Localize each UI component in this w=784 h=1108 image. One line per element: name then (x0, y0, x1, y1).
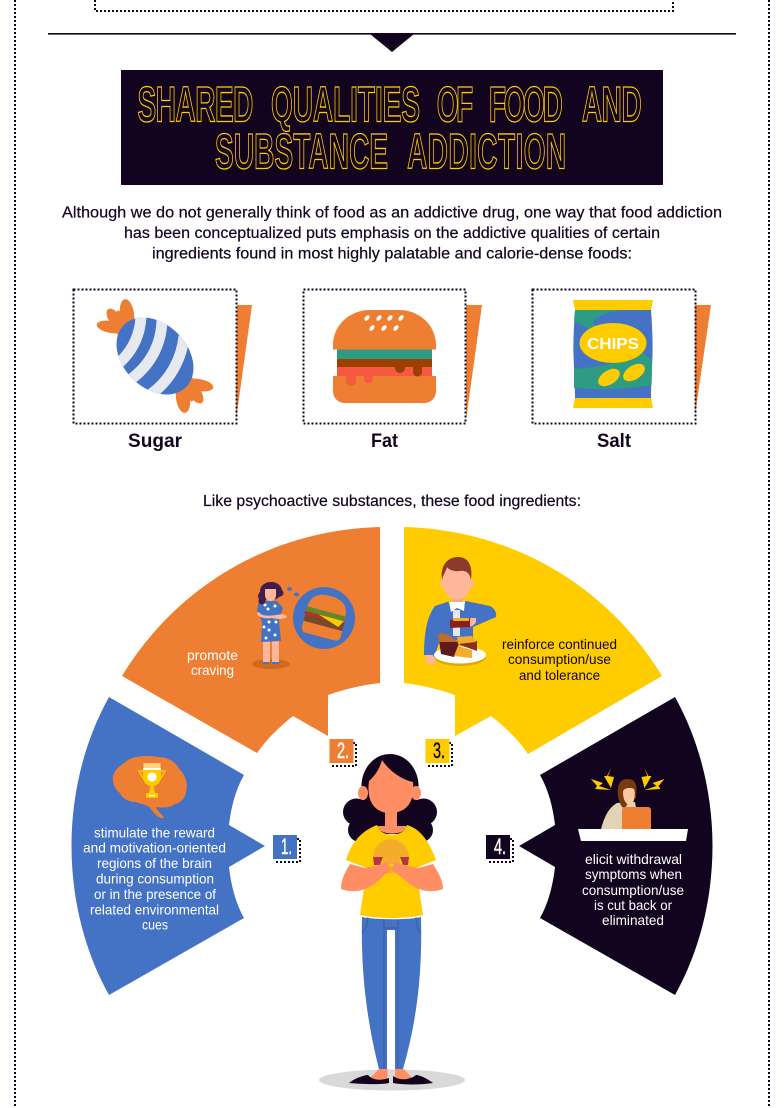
jeans stitching (362, 917, 421, 1068)
text: reinforce: consumption/use (508, 651, 611, 667)
text: stimulate: stimulate the reward (94, 824, 215, 840)
badge 1 (273, 834, 300, 862)
feet and shoes (364, 1069, 418, 1084)
face and neck (358, 760, 421, 834)
text: promote craving (187, 647, 238, 678)
panel: 2 promote craving (122, 527, 380, 753)
title banner: AND (582, 76, 642, 133)
text: promote craving: promote (187, 647, 238, 663)
title banner: QUALITIES (271, 76, 420, 133)
burger held (373, 839, 409, 873)
label: fat: Fat (371, 431, 399, 452)
text: stimulate: regions of the brain (97, 855, 212, 871)
text: reinforce: reinforce continued (502, 636, 617, 652)
jeans (362, 917, 421, 1069)
text: elicit: symptoms when (585, 866, 682, 882)
text: stimulate: related environmental (90, 902, 219, 918)
badge 4: 4. (494, 834, 506, 859)
text: reinforce (502, 636, 617, 683)
icon: chips bag (573, 300, 653, 408)
panel: fat (304, 290, 482, 452)
text: promote craving: craving (191, 662, 234, 678)
label: sugar: Sugar (128, 431, 183, 452)
title banner: SHARED (137, 76, 253, 133)
text: stimulate: cues (142, 916, 168, 932)
title banner: OF (437, 76, 473, 133)
badge 3: 3. (433, 738, 445, 763)
badge 2: 2. (337, 738, 349, 763)
badge 3 (426, 738, 452, 766)
illustration: man eating cake (424, 557, 496, 666)
text: elicit (582, 851, 684, 928)
icon: chips bag: CHIPS (587, 336, 639, 353)
title banner: SUBSTANCE (215, 123, 388, 180)
shirt (346, 825, 436, 918)
text: stimulate: and motivation-oriented (83, 840, 226, 856)
text: elicit: is cut back or (594, 897, 672, 913)
icon: candy (96, 298, 214, 414)
section divider with arrow (48, 33, 736, 52)
icon: burger (333, 310, 436, 403)
panel: 3 reinforce continued consumption (404, 527, 662, 754)
panel: 1 stimulate reward regions (72, 697, 265, 995)
text: elicit: elicit withdrawal (585, 851, 682, 867)
text: elicit: consumption/use (582, 882, 684, 898)
illustration: woman craving burger (252, 582, 355, 669)
ground shadow (319, 1070, 465, 1090)
hair back (343, 754, 437, 842)
central figure: woman holding burger (319, 754, 465, 1090)
badge 1: 1. (281, 834, 292, 859)
badge 4 (486, 834, 513, 862)
text: elicit: eliminated (602, 912, 664, 928)
text: stimulate: during consumption (96, 870, 214, 886)
arms (341, 862, 443, 891)
title banner (121, 70, 663, 185)
text: stimulate: or in the presence of (94, 886, 216, 902)
panel: sugar (74, 290, 252, 452)
intro paragraph: has been conceptualized puts emphasis on the addictive qualities of certain (124, 225, 660, 242)
intro paragraph: ingredients found in most highly palatable and calorie-dense foods: (152, 246, 632, 262)
illustration: stressed woman at laptop (578, 768, 688, 841)
text: reinforce: and tolerance (519, 667, 600, 683)
intro paragraph: Although we do not generally think of food as an addictive drug, one way that food addiction (62, 204, 722, 222)
title banner: FOOD (489, 76, 563, 133)
title banner: ADDICTION (407, 123, 566, 180)
label: salt: Salt (597, 431, 632, 452)
text: stimulate (83, 824, 226, 932)
subheading: Like psychoactive substances, these food ingredients: (203, 493, 581, 510)
previous section dotted box (95, 0, 673, 11)
badge 2 (330, 738, 356, 766)
intro paragraph (62, 204, 722, 262)
panel: 4 elicit withdrawal symptoms (519, 697, 712, 995)
panel: salt (532, 290, 711, 452)
icon: brain with trophy (113, 756, 187, 818)
